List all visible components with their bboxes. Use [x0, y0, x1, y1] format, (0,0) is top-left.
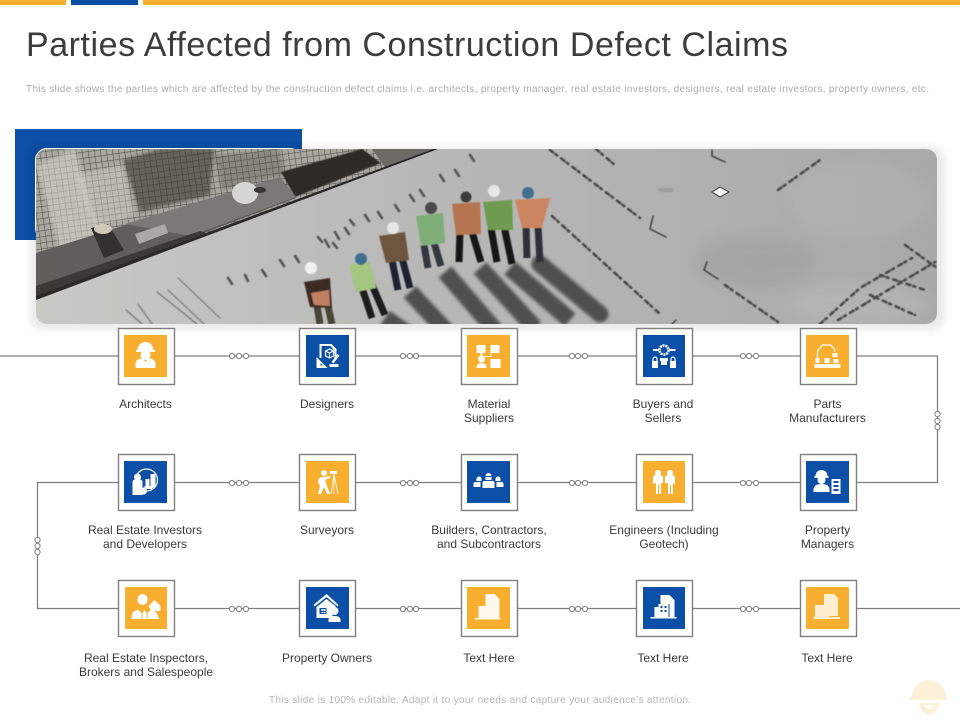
label: Builders, Contractors, and Subcontractors	[431, 523, 547, 551]
label: Surveyors: Surveyors	[300, 523, 354, 537]
workers	[304, 185, 550, 324]
label: Material Suppliers: Suppliers	[464, 411, 514, 425]
icon: supplier boxes	[476, 345, 500, 368]
label: Architects: Architects	[119, 397, 172, 411]
title: Parties Affected from Construction Defect Claims	[26, 26, 788, 64]
label: Property Owners: Property Owners	[282, 651, 372, 665]
label: Designers: Designers	[300, 397, 354, 411]
node: Property Managers	[800, 454, 856, 551]
blue backing panel	[15, 129, 302, 240]
label: Material Suppliers	[464, 397, 514, 425]
marker	[712, 187, 729, 197]
icon: design blueprint with set square	[316, 344, 340, 368]
label: Property Managers	[801, 523, 854, 551]
icon: two engineers	[653, 470, 675, 494]
top accent bars	[0, 0, 960, 5]
barrel and rubbish	[91, 224, 124, 258]
label: Engineers (Including Geotech)	[609, 523, 719, 551]
node: Text Here 1	[462, 580, 518, 665]
label: Builders, Contractors, and Subcontractors: and Subcontractors	[437, 537, 541, 551]
node: Buyers and Sellers	[633, 328, 693, 425]
node: Engineers (Including Geotech)	[609, 454, 719, 551]
label: Parts Manufacturers: Parts	[813, 397, 842, 411]
node: Real Estate Inspectors, Brokers and Salespeople	[79, 580, 213, 679]
label: Buyers and Sellers: Sellers	[645, 411, 681, 425]
node: Surveyors	[300, 454, 356, 537]
node: Designers	[300, 328, 356, 411]
node: Text Here 3	[800, 580, 856, 665]
icon: document and building	[813, 594, 840, 619]
icon: surveyor with tripod	[318, 470, 338, 494]
label: Engineers (Including Geotech): Engineers (Including	[609, 523, 719, 537]
node: Builders, Contractors, and Subcontractors	[431, 454, 547, 551]
label: Parts Manufacturers: Manufacturers	[789, 411, 866, 425]
icon: investor with buildings	[132, 469, 158, 495]
label: Real Estate Inspectors, Brokers and Salespeople: Real Estate Inspectors,	[84, 651, 208, 665]
flow connector lines	[0, 356, 960, 608]
label: Property Managers: Property	[805, 523, 850, 537]
label: Text Here: Text Here	[801, 651, 853, 665]
label: Real Estate Investors and Developers	[88, 523, 202, 551]
label: Builders, Contractors, and Subcontractors: Builders, Contractors,	[431, 523, 547, 537]
icon: document and buildings	[474, 594, 500, 620]
lower dark slab	[36, 177, 296, 297]
connector rings	[35, 353, 940, 612]
node: Parts Manufacturers	[789, 328, 866, 425]
label: Parts Manufacturers	[789, 397, 866, 425]
icon: document and office block	[650, 595, 676, 618]
node: Property Owners	[282, 580, 372, 665]
icon: hard hat and gear watermark	[910, 680, 948, 716]
icon: architect with hard hat	[136, 342, 156, 368]
label: Material Suppliers: Material	[468, 397, 510, 411]
label: Buyers and Sellers: Buyers and	[633, 397, 693, 411]
icon: gear with locks and handshake	[652, 346, 676, 368]
subtitle text: This slide shows the parties which are affected by the construction defect claims i.e. architects, property manager, real estate investors, designers, real estate investors, property owners, etc.	[26, 84, 929, 95]
node: Material Suppliers	[462, 328, 518, 425]
icon: robotic arm and conveyor	[814, 345, 840, 368]
node: Real Estate Investors and Developers	[88, 454, 202, 551]
photo: construction workers on concrete slab	[30, 147, 945, 335]
icon: team of builders	[474, 473, 504, 488]
icon: house with owner	[314, 594, 340, 622]
label: Engineers (Including Geotech): Geotech)	[639, 537, 689, 551]
node: Architects	[118, 328, 174, 411]
label: Text Here: Text Here	[637, 651, 689, 665]
rebar area	[36, 149, 423, 253]
label: Real Estate Inspectors, Brokers and Salespeople	[79, 651, 213, 679]
concrete blotches	[704, 242, 910, 314]
rebar rows	[126, 149, 937, 324]
label: Property Managers: Managers	[801, 537, 854, 551]
label: Real Estate Investors and Developers: Real Estate Investors	[88, 523, 202, 537]
icon: inspector and broker	[132, 594, 160, 619]
shadows	[385, 264, 600, 335]
footer note: This slide is 100% editable. Adapt it to your needs and capture your audience's attention.	[269, 695, 691, 706]
label: Real Estate Inspectors, Brokers and Salespeople: Brokers and Salespeople	[79, 665, 213, 679]
label: Text Here: Text Here	[463, 651, 515, 665]
label: Buyers and Sellers	[633, 397, 693, 425]
dark trench	[281, 149, 381, 197]
icon: property manager with building	[814, 470, 840, 494]
label: Real Estate Investors and Developers: and Developers	[103, 537, 187, 551]
node: Text Here 2	[636, 580, 692, 665]
